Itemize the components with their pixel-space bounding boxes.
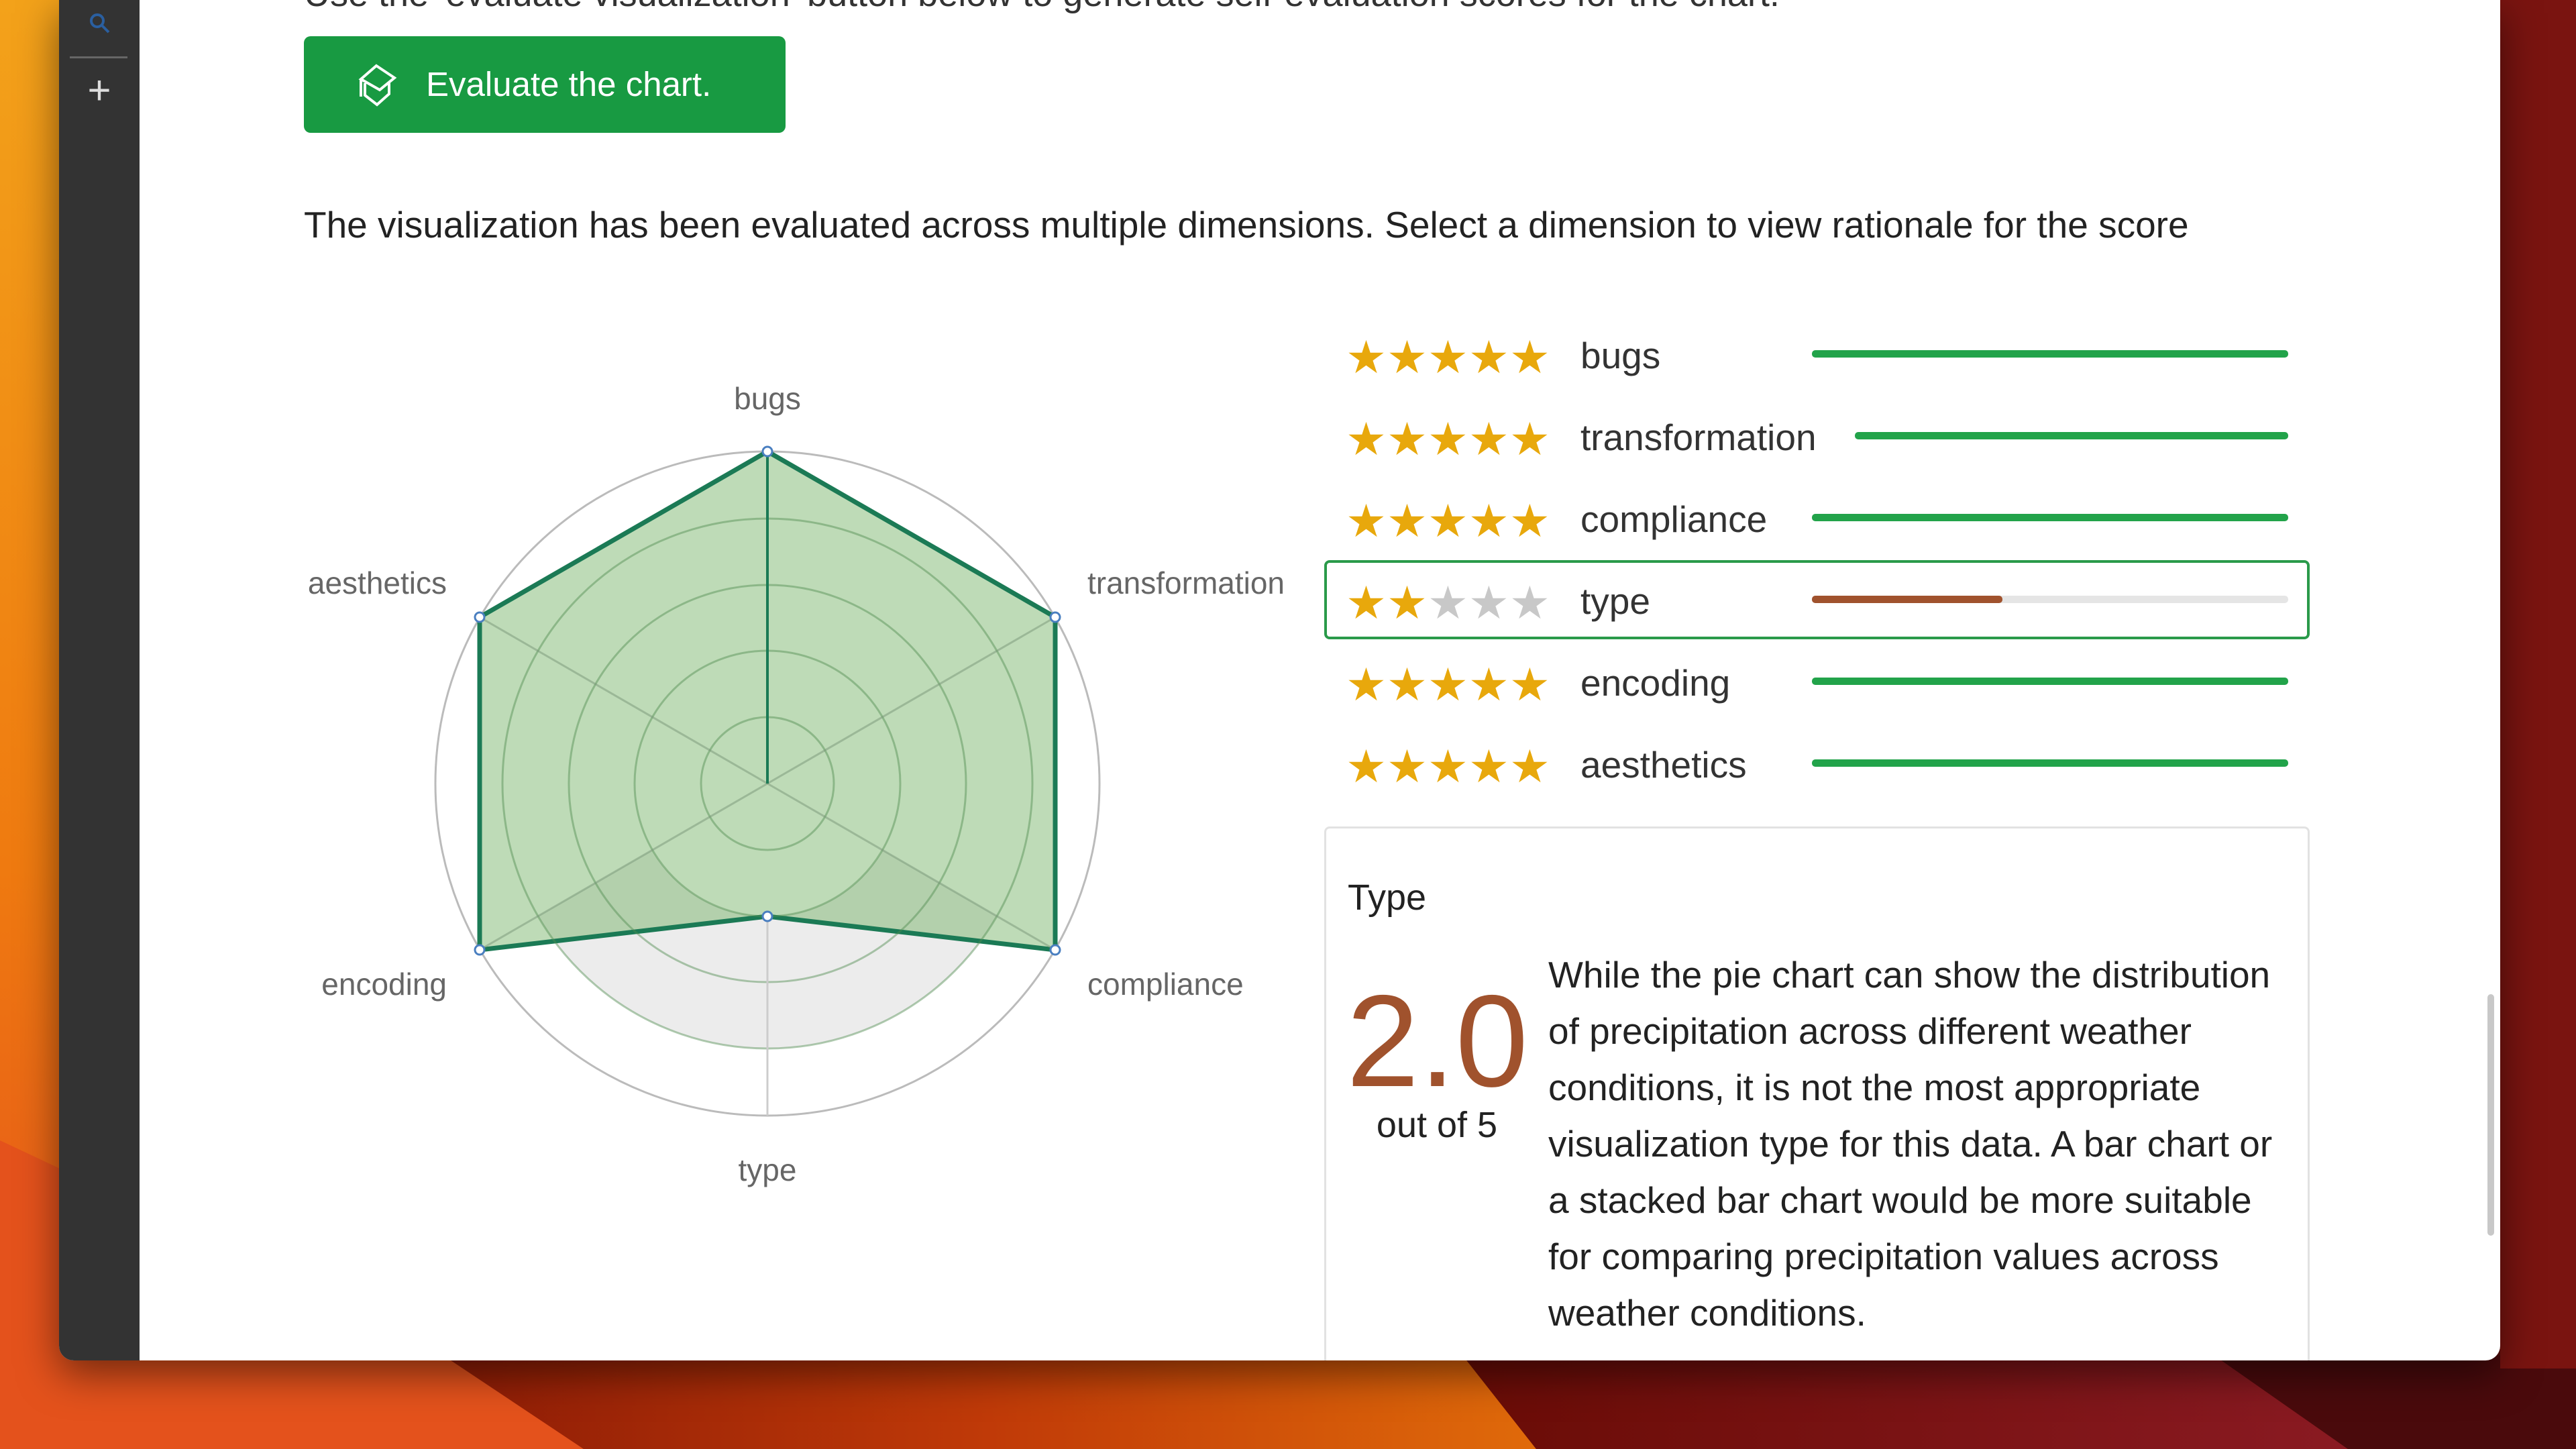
button: evaluate: Evaluate the chart. — [426, 65, 711, 103]
row: type: type — [1580, 580, 1650, 622]
row: aesthetics: aesthetics — [1580, 744, 1747, 786]
row: bugs — [1346, 332, 2288, 383]
row: compliance: ★★★★★ — [1346, 496, 1550, 547]
panel: rationale card — [1324, 826, 2310, 1360]
score number: out of 5 — [1377, 1105, 1497, 1145]
row: compliance: compliance — [1580, 498, 1767, 540]
score list — [1346, 332, 2288, 792]
row: encoding: ★★★★★ — [1346, 659, 1550, 710]
scrollbar — [2487, 994, 2494, 1236]
icon: search — [90, 13, 110, 34]
icon: plus: + — [87, 68, 111, 113]
row: transformation: ★★★★★ — [1346, 414, 1550, 465]
row: compliance — [1346, 496, 2288, 547]
row: encoding — [1346, 659, 2288, 710]
row: encoding: encoding — [1580, 662, 1730, 704]
row: type: ★★★★★ — [1346, 578, 1550, 629]
axis labels: transformation — [1087, 566, 1285, 600]
paragraph: The visualization has been evaluated across multiple dimensions. Select a dimension to view rationale for the score — [304, 204, 2189, 246]
row: transformation: transformation — [1580, 417, 1817, 458]
rationale text: While the pie chart can show the distribution of precipitation across different weather conditions, it is not the most appropriate visualization type for this data. A bar chart or a stacked bar chart would be more suitable for comparing precipitation values across weather conditions. — [1548, 954, 2272, 1334]
row: aesthetics — [1346, 741, 2288, 792]
data polygon — [480, 451, 1055, 950]
axis labels: bugs — [734, 381, 801, 416]
row: aesthetics: ★★★★★ — [1346, 741, 1550, 792]
icon: graduation cap — [358, 64, 397, 107]
highlight sector: type — [538, 850, 997, 1049]
sidebar — [59, 0, 140, 1360]
card heading: Type — [1348, 877, 1426, 918]
row: transformation — [1346, 414, 2288, 465]
button: evaluate — [304, 36, 786, 133]
highlight box: type row — [1324, 560, 2310, 639]
axis labels: type — [739, 1152, 796, 1187]
row: bugs: ★★★★★ — [1346, 332, 1550, 383]
row: bugs: bugs — [1580, 335, 1660, 376]
axis labels — [308, 381, 1285, 1187]
axis labels: compliance — [1087, 967, 1244, 1002]
radar chart — [308, 381, 1285, 1187]
row: type — [1346, 578, 2288, 629]
score number: 2.0 — [1346, 968, 1528, 1114]
axis labels: aesthetics — [308, 566, 447, 600]
axis labels: encoding — [321, 967, 447, 1002]
